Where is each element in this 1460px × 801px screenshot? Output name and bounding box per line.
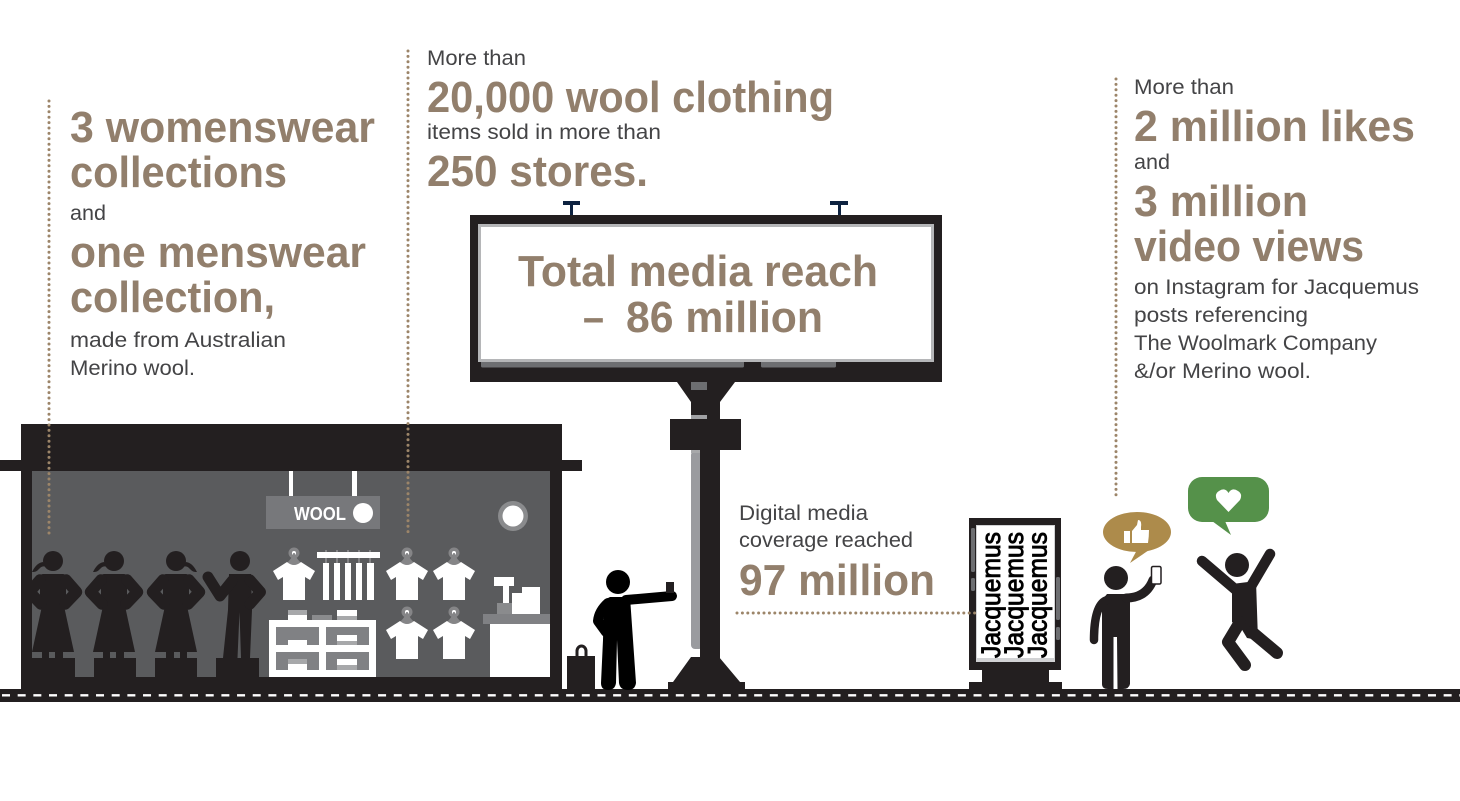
billboard text: 86 million: [626, 293, 823, 342]
heart bubble: [1188, 477, 1269, 535]
text: clothing sold: More than: [427, 47, 526, 70]
store frame: [21, 424, 562, 690]
billboard post: [668, 382, 745, 689]
billboard: [470, 201, 942, 689]
text: digital media: 97 million: [739, 556, 935, 605]
person photographing billboard: [598, 570, 674, 690]
sign text: [976, 532, 1052, 658]
text: womenswear collections: collection,: [70, 273, 275, 322]
text: clothing sold: 250 stores.: [427, 147, 648, 196]
text: digital media: [739, 502, 935, 605]
text: instagram: and: [1134, 151, 1170, 174]
text: clothing sold: items sold in more than: [427, 121, 661, 144]
billboard text: Total media reach: [518, 247, 878, 296]
text: instagram: More than: [1134, 76, 1234, 99]
store: [0, 424, 582, 690]
mannequin 3: [152, 551, 200, 677]
text: instagram: &/or Merino wool.: [1134, 360, 1311, 383]
text: womenswear collections: made from Australian: [70, 329, 286, 352]
sign text: Jacquemus: [976, 532, 1006, 658]
cash counter: [483, 577, 550, 677]
billboard text: [518, 247, 878, 342]
mannequin 4: [208, 551, 260, 677]
wool sign: WOOL: [294, 504, 346, 524]
text: instagram: 2 million likes: [1134, 102, 1415, 151]
text: womenswear collections: collections: [70, 148, 287, 197]
person with phone: [1094, 566, 1161, 689]
t-shirts display: [386, 548, 475, 659]
billboard text: –: [583, 293, 604, 342]
text: instagram: 3 million: [1134, 177, 1308, 226]
sign text: Jacquemus: [1022, 532, 1052, 658]
text: instagram: on Instagram for Jacquemus: [1134, 276, 1419, 299]
mannequin 1: [30, 551, 76, 677]
digital sign: [969, 518, 1062, 690]
text: womenswear collections: [70, 103, 375, 380]
display cabinet: [269, 610, 376, 677]
text: clothing sold: 20,000 wool clothing: [427, 73, 834, 122]
clothes rack: [317, 550, 380, 600]
text: instagram: posts referencing: [1134, 304, 1308, 327]
road: [0, 689, 1460, 702]
store interior: [32, 471, 550, 677]
t-shirt: [273, 548, 315, 600]
shopping bag: [567, 646, 595, 690]
text: womenswear collections: 3 womenswear: [70, 103, 375, 152]
text: clothing sold: [427, 47, 834, 196]
awning ledge: [0, 460, 582, 471]
text: womenswear collections: one menswear: [70, 228, 366, 277]
text: instagram: The Woolmark Company: [1134, 332, 1378, 355]
jumping person: [1202, 553, 1277, 665]
icon: heart: [1216, 489, 1241, 512]
text: digital media: Digital media: [739, 502, 868, 525]
text: womenswear collections: Merino wool.: [70, 357, 195, 380]
thumbs-up bubble: [1103, 512, 1171, 563]
text: instagram: video views: [1134, 222, 1364, 271]
text: digital media: coverage reached: [739, 529, 913, 552]
billboard panel: [470, 215, 942, 382]
text: instagram: [1134, 76, 1419, 383]
sign text: Jacquemus: [999, 532, 1029, 658]
text: womenswear collections: and: [70, 202, 106, 225]
icon: thumbs up: [1124, 520, 1149, 543]
wool sign: [266, 471, 380, 529]
billboard lamps: [563, 201, 848, 215]
wall light: [498, 501, 528, 531]
dotted leader lines: [49, 51, 1116, 613]
mannequin 2: [90, 551, 138, 677]
